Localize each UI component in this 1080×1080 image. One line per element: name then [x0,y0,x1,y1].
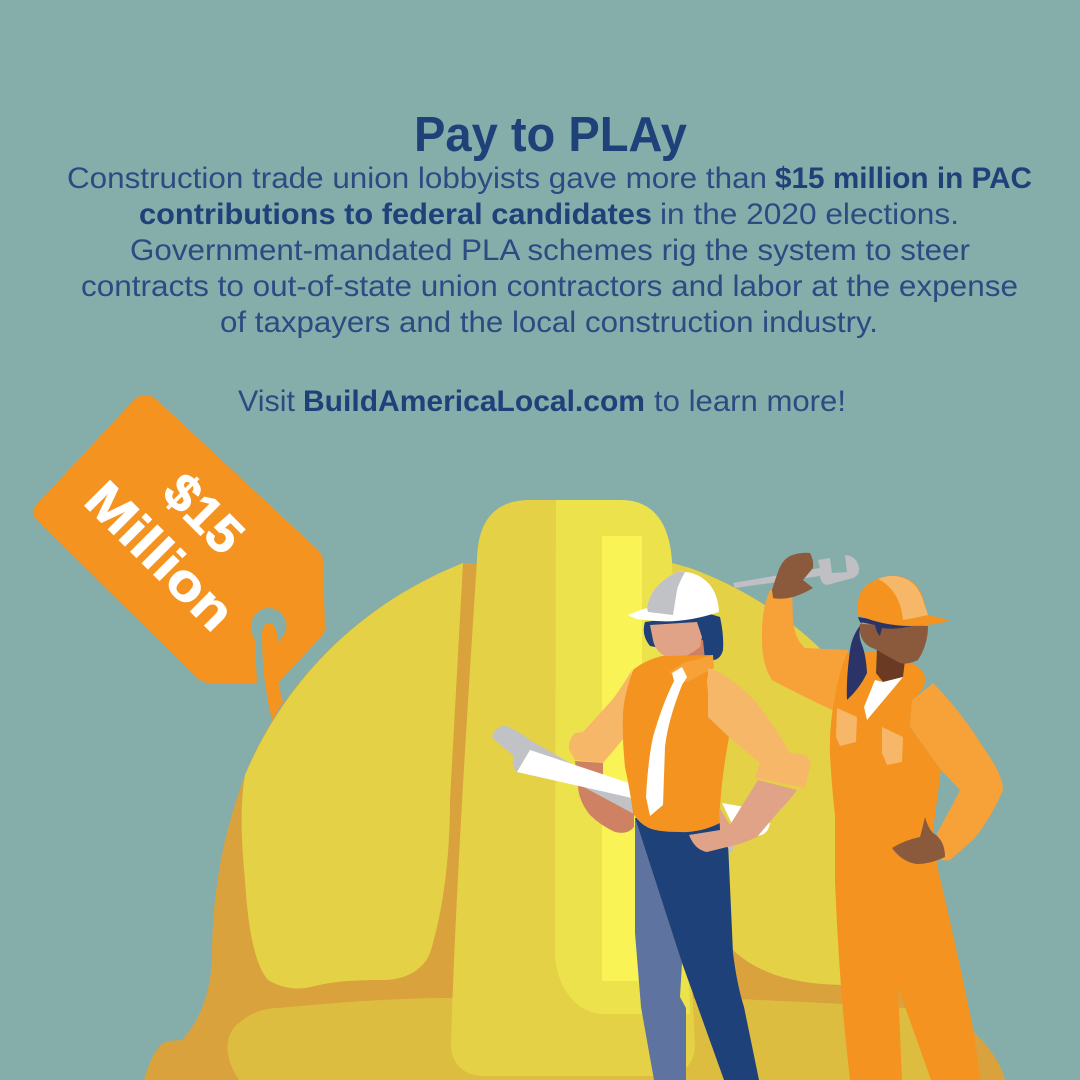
right arm [910,683,1003,861]
body paragraph: contracts to out-of-state union contractors and labor at the expense [81,270,1018,303]
body paragraph: Government-mandated PLA schemes rig the system to steer [130,234,970,267]
hair band [858,617,912,636]
body paragraph: Construction trade union lobbyists gave more than [67,162,767,195]
pocket right [882,727,903,765]
shirt [864,677,903,720]
hard hat illustration [144,500,1005,1080]
pocket left [836,708,857,746]
blueprint roll back [492,726,634,814]
body paragraph: contributions to federal candidates [139,198,652,231]
grey sliver of roll [727,843,735,854]
white hard hat [628,572,719,621]
raised arm [762,590,850,710]
body paragraph [67,162,1032,339]
raised hand [772,553,813,599]
worker with orange hard hat [733,553,1003,1080]
trousers dark leg [635,818,759,1080]
tag amount: $15 [152,462,255,566]
tag word: Million [74,470,245,642]
hat light stripe [878,576,928,620]
tag eyelet and string slot [251,608,286,684]
helmet right panel [672,563,850,985]
ridge bright stripe [602,536,642,981]
orange hard hat [858,576,950,626]
face [650,622,702,660]
worker with white hard hat [492,572,810,1080]
hair [644,613,723,660]
trousers light leg [635,818,686,1080]
left forearm [575,761,634,833]
price tag string [265,680,283,720]
lower hand [892,817,945,864]
vest [623,655,729,832]
hat grey stripe [647,572,685,615]
body paragraph: of taxpayers and the local construction industry. [220,306,878,339]
helmet shell [144,563,1005,1080]
helmet left panel [242,563,463,988]
body paragraph: $15 million in PAC [775,162,1032,195]
price tag [33,395,325,684]
blueprint roll front [517,750,770,836]
collar [658,655,714,682]
ridge highlight [555,500,690,1014]
title: Pay to PLAy [414,108,687,162]
face [860,624,928,664]
neck [662,640,705,665]
helmet centre ridge [451,500,695,1076]
helmet brim [227,998,975,1080]
tie [646,667,687,816]
neck [876,648,905,682]
wrench [733,555,859,588]
call to action [238,385,846,418]
ponytail [847,618,867,700]
call to action: BuildAmericaLocal.com [303,385,645,418]
right sleeve [708,668,810,788]
tag shape [33,395,325,684]
right forearm [689,780,797,852]
call to action: to learn more! [654,385,846,418]
call to action: Visit [238,385,296,418]
left sleeve [569,670,632,763]
body paragraph: in the 2020 elections. [660,198,959,231]
overalls [830,652,980,1080]
